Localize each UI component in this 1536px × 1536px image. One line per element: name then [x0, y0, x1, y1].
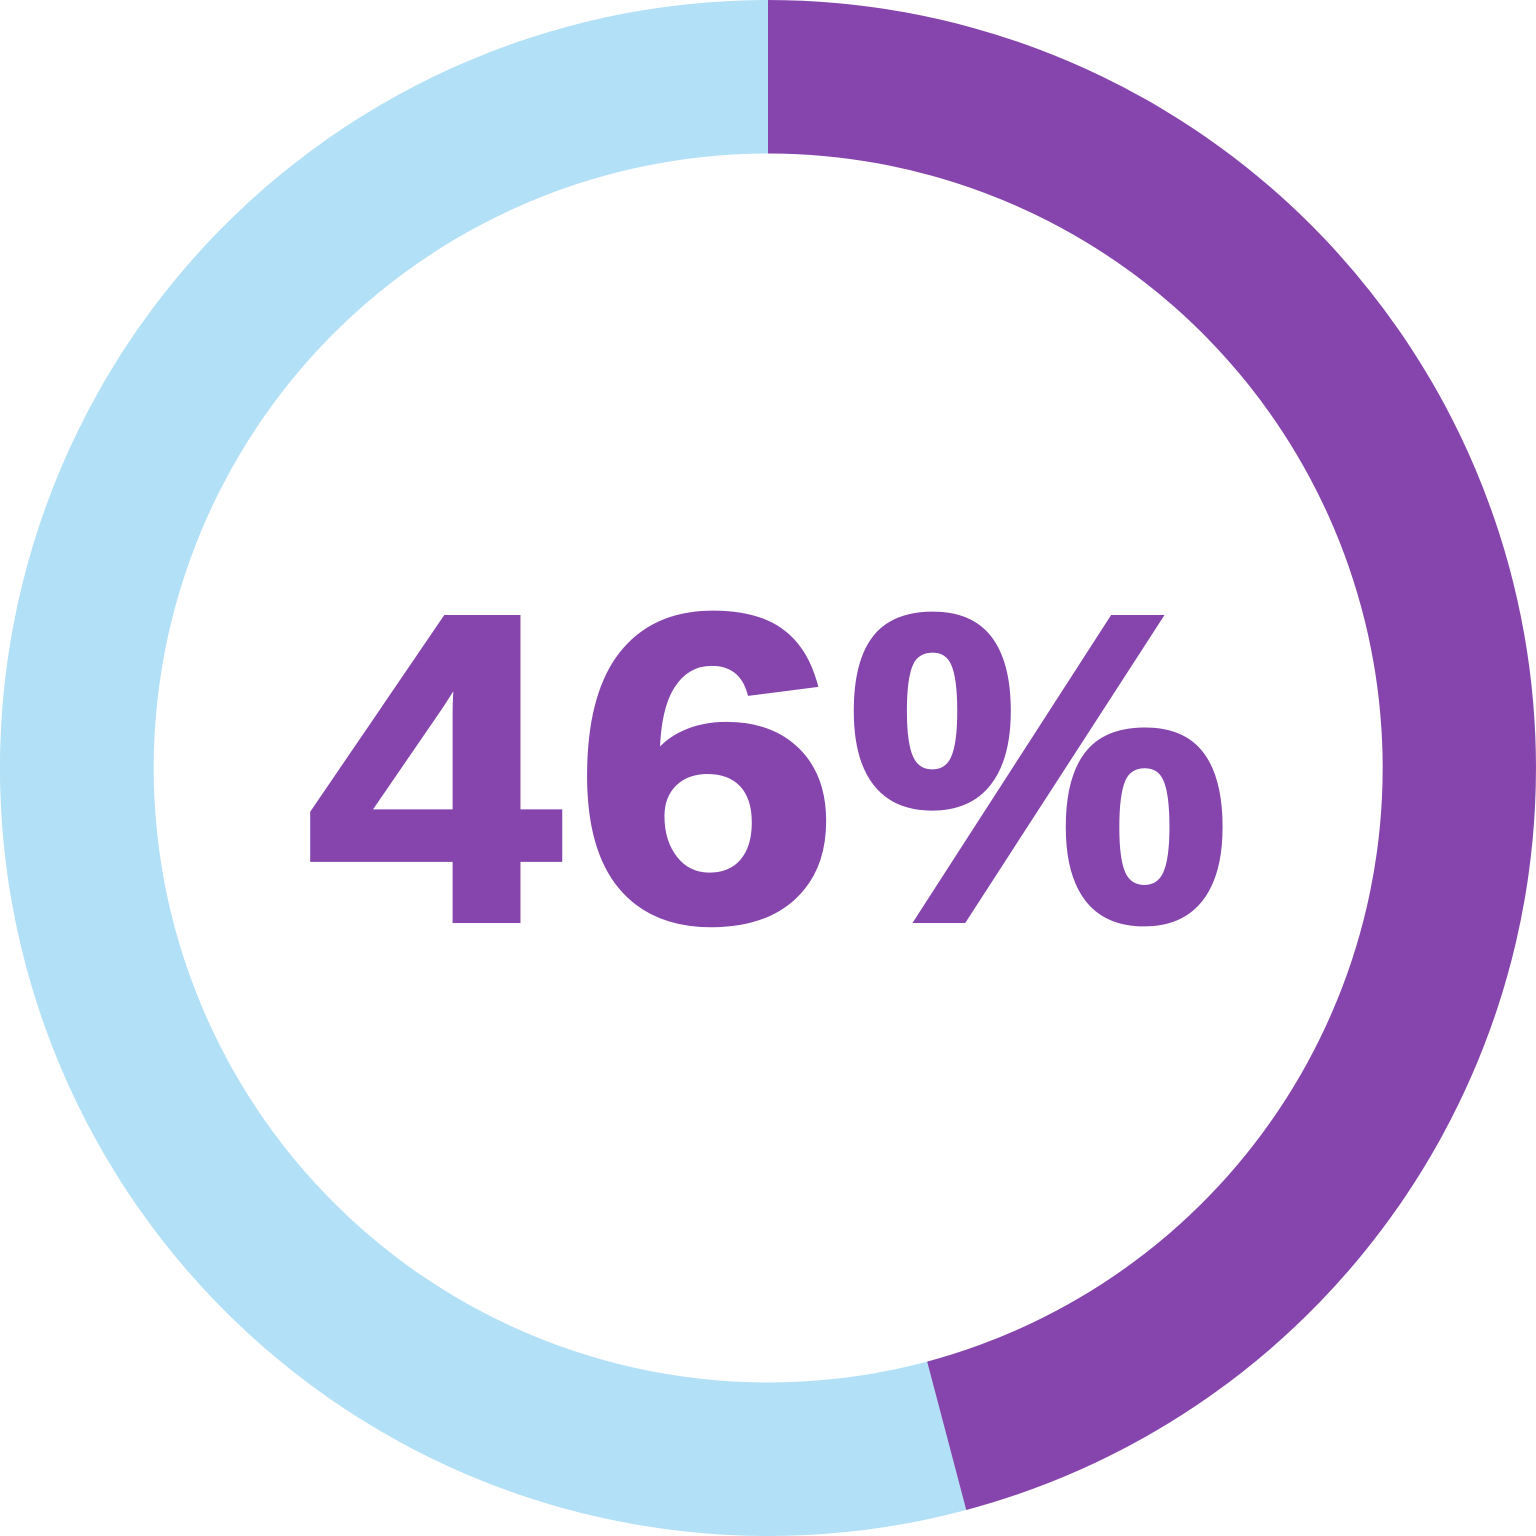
ring segment: 46 percent share [768, 0, 1536, 1510]
ring segment: remaining share [0, 0, 966, 1536]
center value: 4 [308, 525, 563, 1012]
center value: % [847, 525, 1230, 1012]
center value: 6 [574, 525, 839, 1012]
center value [308, 525, 1230, 1012]
